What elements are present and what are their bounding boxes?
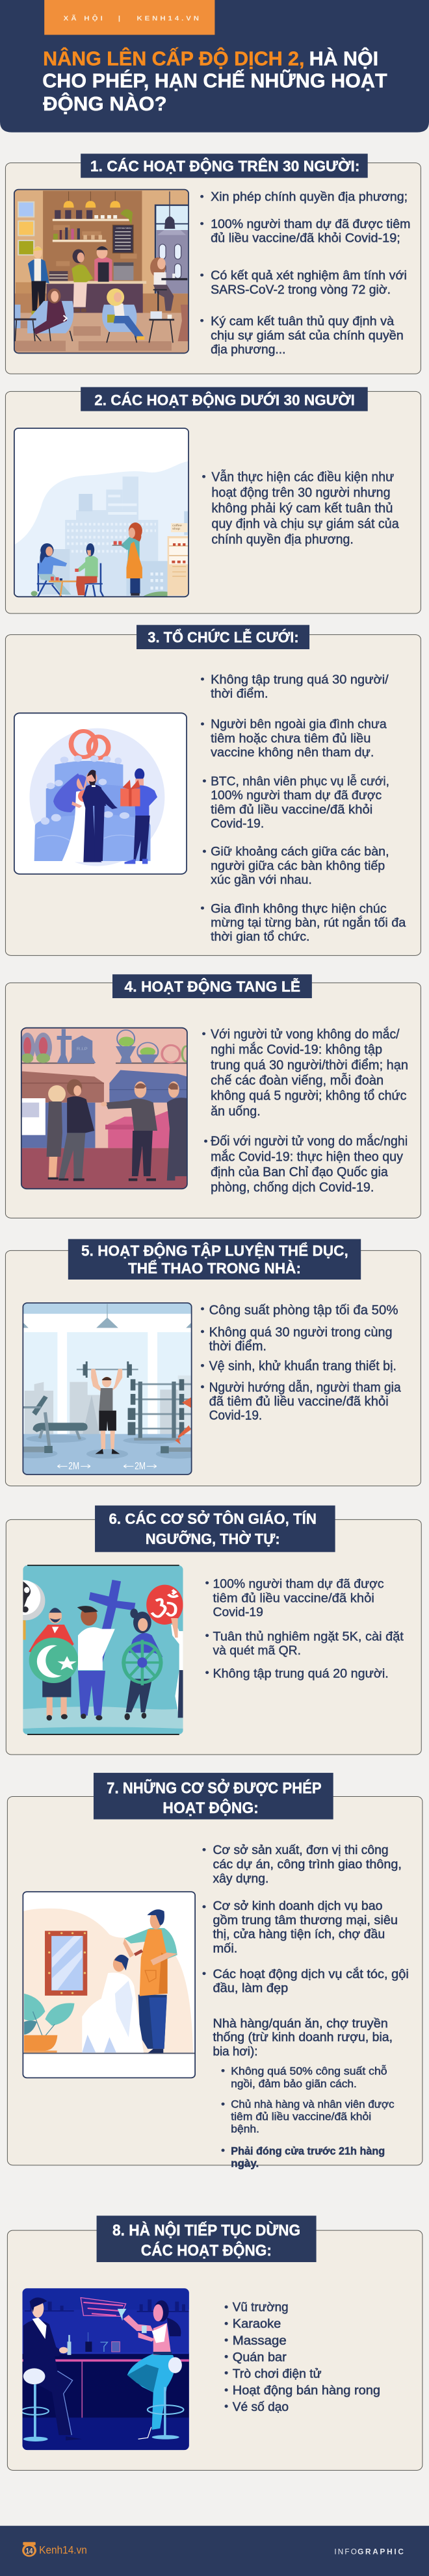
- title: HÀ NỘI: [309, 47, 378, 70]
- heading 4: [112, 974, 312, 998]
- bullet list 1: SARS-CoV-2 trong vòng 72 giờ.: [211, 283, 391, 297]
- table: [49, 576, 77, 597]
- cross: [89, 1580, 135, 1662]
- illustration: coffee shop: [14, 190, 190, 354]
- barber: [123, 1909, 177, 2053]
- bullet list 1: Ký cam kết tuân thủ quy định và: [211, 314, 395, 328]
- cafe table with laptop: [149, 311, 174, 342]
- heading 5: THỂ THAO TRONG NHÀ:: [128, 1259, 301, 1277]
- barbell lifter: [77, 1361, 138, 1454]
- bullet list 7: Nhà hàng/quán ăn, chợ truyền: [213, 2016, 388, 2031]
- sub bullet list 7: tiêm đủ liều vaccine/đã khỏi: [231, 2110, 371, 2122]
- illustration: bar: [21, 2288, 189, 2451]
- bullet list 7: đầu, làm đẹp: [213, 1981, 288, 1996]
- illustration: religious symbols: [7, 1565, 183, 1734]
- bullet list 8: Quán bar: [233, 2351, 287, 2364]
- heading 4: 4. HOẠT ĐỘNG TANG LỄ: [125, 978, 300, 995]
- bullet list 1: [200, 190, 410, 357]
- neon sign: [81, 2298, 126, 2316]
- bullet list 6: và quét mã QR.: [213, 1643, 301, 1657]
- category tag: XÃ HỘI: [64, 14, 103, 22]
- bullet list 6: tiêm đủ liều vaccine/đã khỏi: [213, 1591, 374, 1605]
- bullet list 3: người giữa các bàn không tiếp: [211, 858, 385, 873]
- flower baskets: [116, 1030, 190, 1063]
- wreaths: [20, 1033, 52, 1063]
- coffee shop stand: [168, 523, 189, 596]
- title: ĐỘNG NÀO?: [43, 92, 167, 115]
- bullet list 7: Các hoạt động dịch vụ cắt tóc, gội: [213, 1967, 409, 1981]
- bullet list 3: thời gian tổ chức.: [211, 929, 309, 944]
- weight bench: [23, 1395, 192, 1453]
- brand name: Kenh14.vn: [39, 2544, 87, 2556]
- waitress with tray: [112, 522, 142, 596]
- title: NÂNG LÊN CẤP ĐỘ DỊCH 2,: [43, 47, 304, 70]
- gravestone: R.I.P: [77, 1048, 88, 1051]
- bullet list 4: [202, 1027, 408, 1194]
- right bar stool: [148, 2357, 183, 2440]
- sub bullet list 7: ngồi, đảm bảo giãn cách.: [231, 2078, 357, 2090]
- bullet list 3: [201, 672, 406, 944]
- seated man in green: [75, 543, 103, 597]
- sub bullet list 7: ngày.: [231, 2157, 259, 2169]
- bullet list 1: Có kết quả xét nghiệm âm tính với: [211, 268, 407, 283]
- bullet list 7: gồm trung tâm thương mại, siêu: [213, 1913, 398, 1927]
- bullet list 5: [201, 1302, 401, 1423]
- footer: [0, 2526, 429, 2576]
- bullet list 5: thời điểm.: [209, 1339, 266, 1353]
- heading 6: 6. CÁC CƠ SỞ TÔN GIÁO, TÍN: [109, 1510, 317, 1527]
- bullet list 8: Karaoke: [233, 2317, 281, 2331]
- bottles and glasses: [68, 2332, 120, 2355]
- bullet list 5: đã tiêm đủ liều vaccine/đã khỏi: [209, 1394, 389, 1408]
- woman at window table: [150, 257, 187, 311]
- plant: [24, 1994, 74, 2053]
- heading 8: 8. HÀ NỘI TIẾP TỤC DỪNG: [112, 2221, 300, 2239]
- gravestone: [68, 1035, 96, 1063]
- coffee menu board: [112, 225, 133, 253]
- bullet list 7: thị, cửa hàng tiện ích, chợ đầu: [213, 1927, 385, 1942]
- bullet list 3: thời điểm.: [211, 686, 268, 701]
- bullet list 1: địa phương...: [211, 342, 285, 357]
- bullet list 1: 100% người tham dự đã được tiêm: [211, 217, 410, 231]
- heading 5: [68, 1239, 361, 1280]
- left bar stool: [21, 2368, 49, 2441]
- coffee shop stand: shop: [172, 527, 180, 531]
- 2m distance labels: [69, 1462, 145, 1469]
- bullet list 8: [225, 2300, 380, 2414]
- bullet list 7: các dự án, công trình giao thông,: [213, 1858, 402, 1872]
- bullet list 8: Trò chơi điện tử: [233, 2367, 322, 2381]
- illustration: outdoor cafe: [14, 428, 189, 597]
- infographic label: INFO: [334, 2548, 357, 2557]
- bullet list 1: đủ liều vaccine/đã khỏi Covid-19;: [211, 231, 400, 246]
- panel 2: activities under 30 people: [5, 387, 421, 613]
- heading 2: [81, 387, 368, 411]
- bullet list 3: vaccine không nên tham dự.: [211, 745, 374, 759]
- panel 1: activities over 30 people: [5, 154, 421, 374]
- bullet list 4: nghi mắc Covid-19: không tập: [211, 1042, 382, 1057]
- heading 2: 2. CÁC HOẠT ĐỘNG DƯỚI 30 NGƯỜI: [94, 391, 355, 409]
- heading 6: NGƯỠNG, THỜ TỰ:: [146, 1530, 280, 1547]
- groom: [82, 770, 118, 862]
- category tag: |: [118, 15, 120, 22]
- heading 1: 1. CÁC HOẠT ĐỘNG TRÊN 30 NGƯỜI:: [90, 157, 360, 175]
- bullet list 2: [202, 469, 399, 547]
- seated woman in blue: [37, 543, 71, 597]
- illustration: hair salon: [23, 1892, 195, 2078]
- guest with gift: [120, 768, 157, 864]
- barista: [94, 246, 112, 282]
- panel 3: weddings: [5, 625, 421, 955]
- man gesturing: [101, 1081, 157, 1181]
- bullet list 3: 100% người tham dự đã được: [211, 788, 382, 802]
- weight rack: [128, 1379, 192, 1441]
- bullet list 3: xúc gần với nhau.: [211, 872, 312, 886]
- bullet list 3: Người bên ngoài gia đình chưa: [211, 717, 387, 731]
- category tag: KENH14.VN: [136, 15, 199, 22]
- panel 5: indoor sports: [5, 1239, 421, 1486]
- heading 5: 5. HOẠT ĐỘNG TẬP LUYỆN THỂ DỤC,: [81, 1243, 348, 1259]
- bullet list 6: 100% người tham dự đã được: [213, 1577, 384, 1591]
- bullet list 8: Hoạt động bán hàng rong: [233, 2384, 380, 2398]
- yin yang sign: [7, 1580, 45, 1640]
- heading 3: [136, 625, 309, 649]
- om sign: [146, 1585, 183, 1625]
- customer under white cape: [82, 1955, 144, 2053]
- bullet list 7: bia hơi):: [213, 2045, 258, 2059]
- caskets: [21, 1070, 187, 1148]
- bullet list 3: Covid-19.: [211, 816, 264, 831]
- person in white: [77, 1606, 115, 1720]
- title: [42, 47, 387, 115]
- illustration: wedding couple: [14, 713, 187, 874]
- bullet list 4: chế các đoàn viếng, mỗi đoàn: [211, 1073, 384, 1087]
- 2m distance labels: 2M: [135, 1460, 146, 1472]
- panel 6: religious establishments: [6, 1506, 421, 1755]
- icon: kenh14 logo: 14: [26, 2547, 33, 2555]
- heading 3: 3. TỔ CHỨC LỄ CƯỚI:: [148, 628, 299, 646]
- sub bullet list 7: [222, 2064, 395, 2169]
- 2m distance labels: 2M: [68, 1460, 79, 1472]
- woman with cocktail: [118, 2300, 181, 2439]
- heading 7: [94, 1773, 333, 1820]
- bullet list 3: tiêm hoặc chưa tiêm đủ liều: [211, 731, 370, 745]
- man in suit: [23, 2297, 82, 2440]
- bullet list 1: chịu sự giám sát của chính quyền: [211, 328, 404, 342]
- illustration: funeral home: [20, 1028, 190, 1189]
- bullet list 3: tiêm đủ liều vaccine/đã khỏi: [211, 802, 372, 816]
- heading 7: 7. NHỮNG CƠ SỞ ĐƯỢC PHÉP: [107, 1778, 322, 1797]
- coffee shop stand: coffee: [172, 524, 182, 528]
- panel 8: activities still suspended: [7, 2216, 422, 2470]
- woman with dharma wheel: [122, 1608, 162, 1720]
- heading 7: HOẠT ĐỘNG:: [162, 1798, 259, 1817]
- man in dark shirt: [167, 1081, 187, 1181]
- man with crescent shield: [29, 1608, 78, 1721]
- bullet list 7: thống (trừ kinh doanh rượu, bia,: [213, 2031, 393, 2044]
- bearded man: [58, 1079, 94, 1181]
- bullet list 3: Không tập trung quá 30 người/: [211, 672, 389, 686]
- man in blue jacket: [28, 246, 49, 315]
- bride: [53, 773, 86, 862]
- woman in olive top: [72, 249, 93, 312]
- panel 4: funerals: [5, 974, 421, 1218]
- infographic label: [334, 2548, 404, 2557]
- sub bullet list 7: Không quá 50% công suất chỗ: [231, 2064, 387, 2078]
- mirror: [45, 1931, 87, 1996]
- category tag: [44, 0, 214, 35]
- sub bullet list 7: Phải đóng cửa trước 21h hàng: [231, 2145, 385, 2157]
- heading 8: [97, 2216, 317, 2262]
- bullet list 7: mối.: [213, 1942, 237, 1955]
- bullet list 7: Cơ sở sản xuất, đơn vị thi công: [213, 1844, 389, 1857]
- coffee menu board: COFFEE MENU: [116, 227, 133, 229]
- icon: kenh14 logo: [22, 2542, 36, 2557]
- bullet list 8: Massage: [233, 2334, 287, 2348]
- bullet list 4: phòng, chống dịch Covid-19.: [211, 1179, 374, 1194]
- illustration: gym: [22, 1302, 192, 1475]
- blonde woman with phone: [102, 289, 144, 342]
- sub bullet list 7: bệnh.: [231, 2122, 259, 2135]
- infographic label: GRAPHIC: [358, 2548, 404, 2557]
- bullet list 7: Cơ sở kinh doanh dịch vụ bao: [213, 1900, 382, 1913]
- bullet list 7: [202, 1844, 409, 2059]
- sub bullet list 7: Chủ nhà hàng và nhân viên được: [231, 2098, 395, 2111]
- panel 7: establishments allowed to operate: [7, 1773, 422, 2169]
- bullet list 6: Không tập trung quá 20 người.: [213, 1666, 389, 1681]
- heading 6: [95, 1506, 335, 1552]
- heading 8: CÁC HOẠT ĐỘNG:: [141, 2241, 272, 2260]
- seated woman left: [27, 289, 73, 341]
- bullet list 5: Covid-19.: [209, 1408, 262, 1423]
- bullet list 3: Gia đình không thực hiện chúc: [211, 901, 387, 916]
- bullet list 4: ăn uống.: [211, 1103, 261, 1118]
- bullet list 8: Vé số dạo: [233, 2400, 289, 2414]
- bullet list 3: Giữ khoảng cách giữa các bàn,: [211, 844, 389, 858]
- woman mourner: [47, 1085, 66, 1179]
- bullet list 6: [205, 1577, 404, 1681]
- heading 1: [81, 154, 368, 178]
- bullet list 8: Vũ trường: [233, 2300, 289, 2314]
- bullet list 7: xây dựng.: [213, 1872, 268, 1886]
- bullet list 2: chính quyền địa phương.: [211, 532, 354, 547]
- header banner: [0, 0, 429, 133]
- bullet list 6: Covid-19: [213, 1604, 263, 1619]
- bullet list 1: Xin phép chính quyền địa phương;: [211, 190, 408, 204]
- title: CHO PHÉP, HẠN CHẾ NHỮNG HOẠT: [42, 70, 387, 92]
